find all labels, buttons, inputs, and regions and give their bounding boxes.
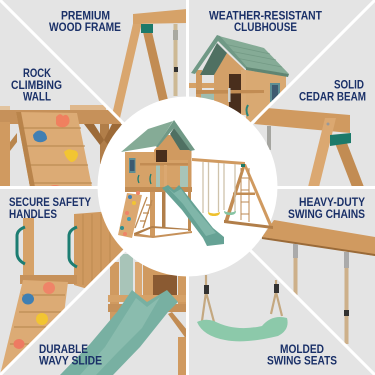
panel: solid cedar beam photo xyxy=(254,108,364,187)
heading: secure safety handles xyxy=(9,196,91,221)
panel: swing chains photo xyxy=(262,220,375,344)
heading: solid cedar beam xyxy=(299,78,366,104)
heading: weather-resistant clubhouse: CLUBHOUSE xyxy=(234,21,297,34)
heading: durable wavy slide: DURABLE xyxy=(39,343,88,356)
icon: red climbing hold xyxy=(56,114,70,127)
heading: rock climbing wall: ROCK xyxy=(23,67,52,80)
center illustration: full swing set xyxy=(118,120,273,246)
heading: molded swing seats xyxy=(267,343,337,368)
icon: green safety handles xyxy=(17,227,77,267)
climbing wall xyxy=(118,191,142,238)
panel: swing seat photo xyxy=(197,275,288,341)
heading: durable wavy slide: WAVY SLIDE xyxy=(39,354,102,368)
heading: secure safety handles: SECURE SAFETY xyxy=(9,196,91,209)
panel: safety handles photo xyxy=(0,210,125,375)
heading: rock climbing wall: WALL xyxy=(23,90,51,104)
heading: heavy-duty swing chains: SWING CHAINS xyxy=(288,208,365,221)
swing frame xyxy=(192,158,273,229)
heading: heavy-duty swing chains: HEAVY-DUTY xyxy=(299,196,365,209)
icon: yellow seat xyxy=(208,212,220,216)
heading: weather-resistant clubhouse: WEATHER-RESISTANT xyxy=(209,10,322,22)
panel: clubhouse photo xyxy=(189,35,289,130)
heading: durable wavy slide xyxy=(39,343,102,368)
panel: rock climbing wall photo xyxy=(0,105,122,189)
heading: molded swing seats: SWING SEATS xyxy=(267,354,337,368)
heading: rock climbing wall xyxy=(11,67,62,104)
icon: climbing holds xyxy=(14,282,55,349)
legs and base xyxy=(134,192,192,238)
icon: blue climbing hold xyxy=(33,130,47,142)
heading: molded swing seats: MOLDED xyxy=(280,343,324,356)
heading: premium wood frame: PREMIUM xyxy=(61,10,110,22)
clubhouse xyxy=(121,120,195,192)
panel: premium wood frame photo xyxy=(112,9,187,118)
heading: premium wood frame xyxy=(49,10,121,34)
heading: secure safety handles: HANDLES xyxy=(9,208,57,221)
icon: green seat xyxy=(224,211,236,215)
slide xyxy=(162,185,224,246)
heading: rock climbing wall: CLIMBING xyxy=(11,79,62,92)
panel: wavy slide photo xyxy=(60,254,187,375)
heading: weather-resistant clubhouse xyxy=(209,10,322,34)
icon: yellow climbing hold xyxy=(64,149,78,162)
icon: green bracket xyxy=(330,133,351,146)
icon: green swing seat xyxy=(197,317,288,341)
heading: heavy-duty swing chains xyxy=(288,196,365,221)
center circle xyxy=(98,96,278,276)
heading: solid cedar beam: SOLID xyxy=(334,78,364,92)
swing ropes xyxy=(203,162,235,213)
roof xyxy=(121,121,173,152)
heading: premium wood frame: WOOD FRAME xyxy=(49,21,121,34)
